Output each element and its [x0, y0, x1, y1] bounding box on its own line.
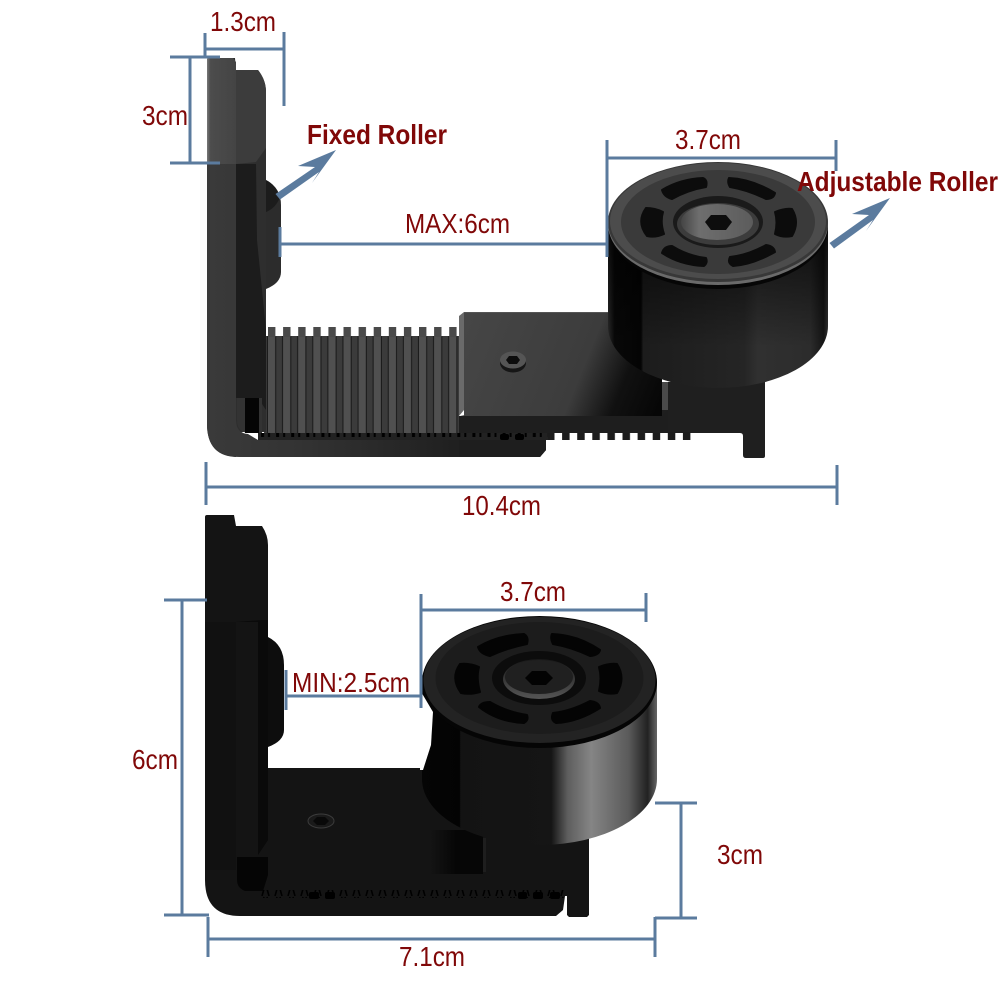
set screw: [500, 352, 526, 372]
slider underside: [459, 410, 668, 457]
roller hub: [492, 651, 586, 705]
label 3.7cm: 3.7cm: [500, 576, 566, 607]
label 6cm: 6cm: [132, 744, 178, 775]
roller slots: [455, 634, 622, 723]
dimension: MIN 2.5cm: [286, 667, 421, 710]
sliding plate: [459, 312, 668, 416]
adjustable roller: [608, 162, 828, 388]
bracket body: [205, 515, 589, 917]
plate lighter front face: [207, 58, 236, 164]
dimension: 3cm height: [142, 57, 220, 163]
label 1.3cm: 1.3cm: [210, 6, 276, 37]
adjustable roller: [420, 616, 657, 845]
arrow: fixed roller: [276, 150, 336, 200]
fixed roller: [268, 637, 284, 747]
arrow: adjustable roller: [830, 198, 890, 248]
dimension: 3cm right: [655, 803, 763, 918]
roller slots: [641, 178, 796, 266]
top bracket: maximum extension: [207, 58, 828, 458]
feet teeth: [547, 432, 691, 440]
label 3cm: 3cm: [142, 100, 188, 131]
bottom bracket: minimum extension: [205, 515, 657, 917]
heading: Fixed Roller: Fixed Roller: [307, 119, 447, 150]
slider shadow: [430, 830, 483, 874]
slot row: [260, 890, 565, 898]
label 7.1cm: 7.1cm: [399, 941, 465, 972]
label MAX:6cm: MAX:6cm: [405, 208, 510, 239]
plate front face: [205, 622, 236, 870]
dimension: 1.3cm: [205, 6, 284, 106]
vertical plate: [207, 58, 266, 457]
plate lower notch: [237, 857, 268, 891]
plate lower notch: [237, 398, 262, 433]
bracket base with foot: [460, 382, 765, 458]
roller hub: [673, 196, 763, 248]
fixed roller: [266, 180, 281, 289]
set screw: [308, 814, 334, 828]
label 10.4cm: 10.4cm: [462, 490, 541, 521]
label 3cm: 3cm: [717, 839, 763, 870]
label MIN:2.5cm: MIN:2.5cm: [292, 667, 410, 698]
plate upper block: [236, 70, 266, 164]
label 3.7cm: 3.7cm: [675, 124, 741, 155]
bracket corner and base bar: [207, 164, 546, 457]
plate inner channel: [236, 164, 266, 410]
ribbed rail: [264, 327, 459, 434]
